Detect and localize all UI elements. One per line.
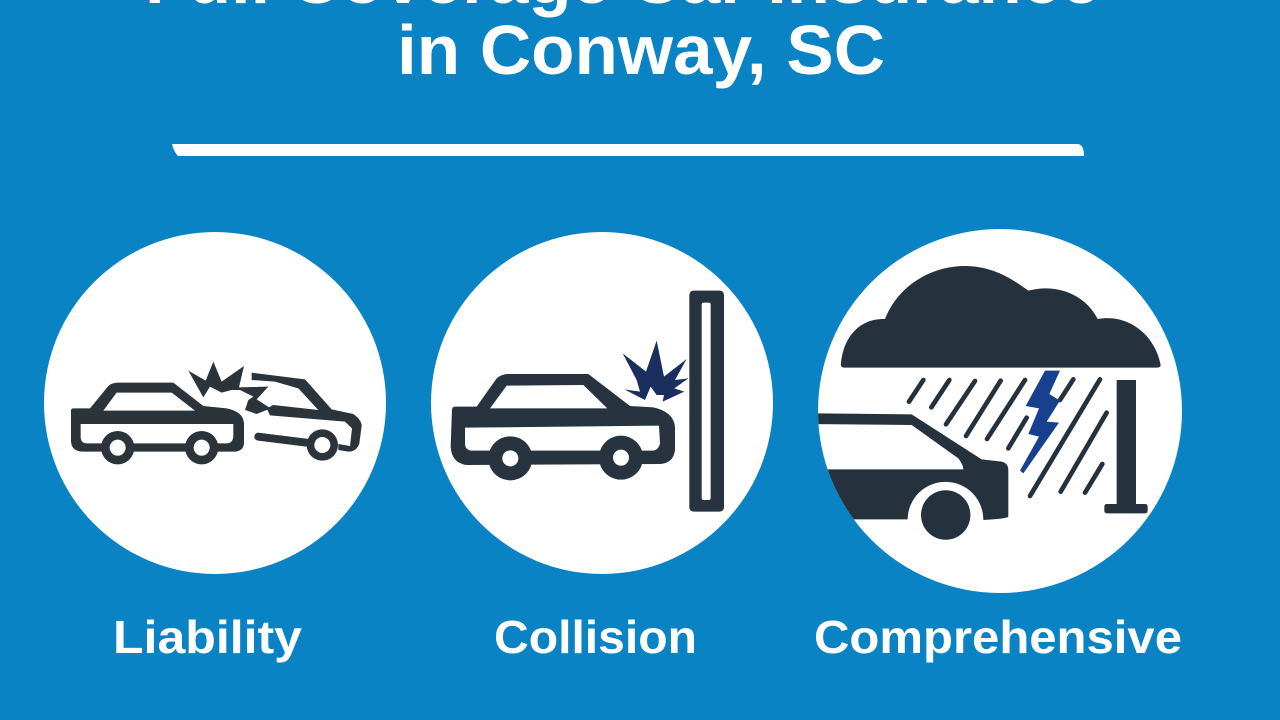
collision circle xyxy=(431,232,773,574)
sign post xyxy=(1104,380,1148,513)
icon: lightning bolt xyxy=(1020,371,1060,473)
label: liability: Liability xyxy=(113,611,302,663)
icon: impact burst xyxy=(623,341,688,402)
label: collision: Collision xyxy=(494,611,697,663)
panel: comprehensive xyxy=(808,229,1182,663)
icon: storm cloud xyxy=(841,266,1161,368)
icon: two cars crashing xyxy=(71,362,362,464)
liability circle xyxy=(44,232,386,574)
panel: liability xyxy=(44,232,386,663)
divider bar xyxy=(172,144,1084,156)
label: comprehensive: Comprehensive xyxy=(814,611,1182,663)
rain streaks xyxy=(909,379,1107,496)
panel: collision xyxy=(431,232,773,663)
title: in Conway, SC xyxy=(397,11,885,89)
icon: car in a storm xyxy=(808,266,1161,540)
car front xyxy=(808,413,1008,540)
icon: car hitting a post xyxy=(451,291,724,512)
title xyxy=(145,0,1100,89)
comprehensive circle xyxy=(818,229,1182,593)
